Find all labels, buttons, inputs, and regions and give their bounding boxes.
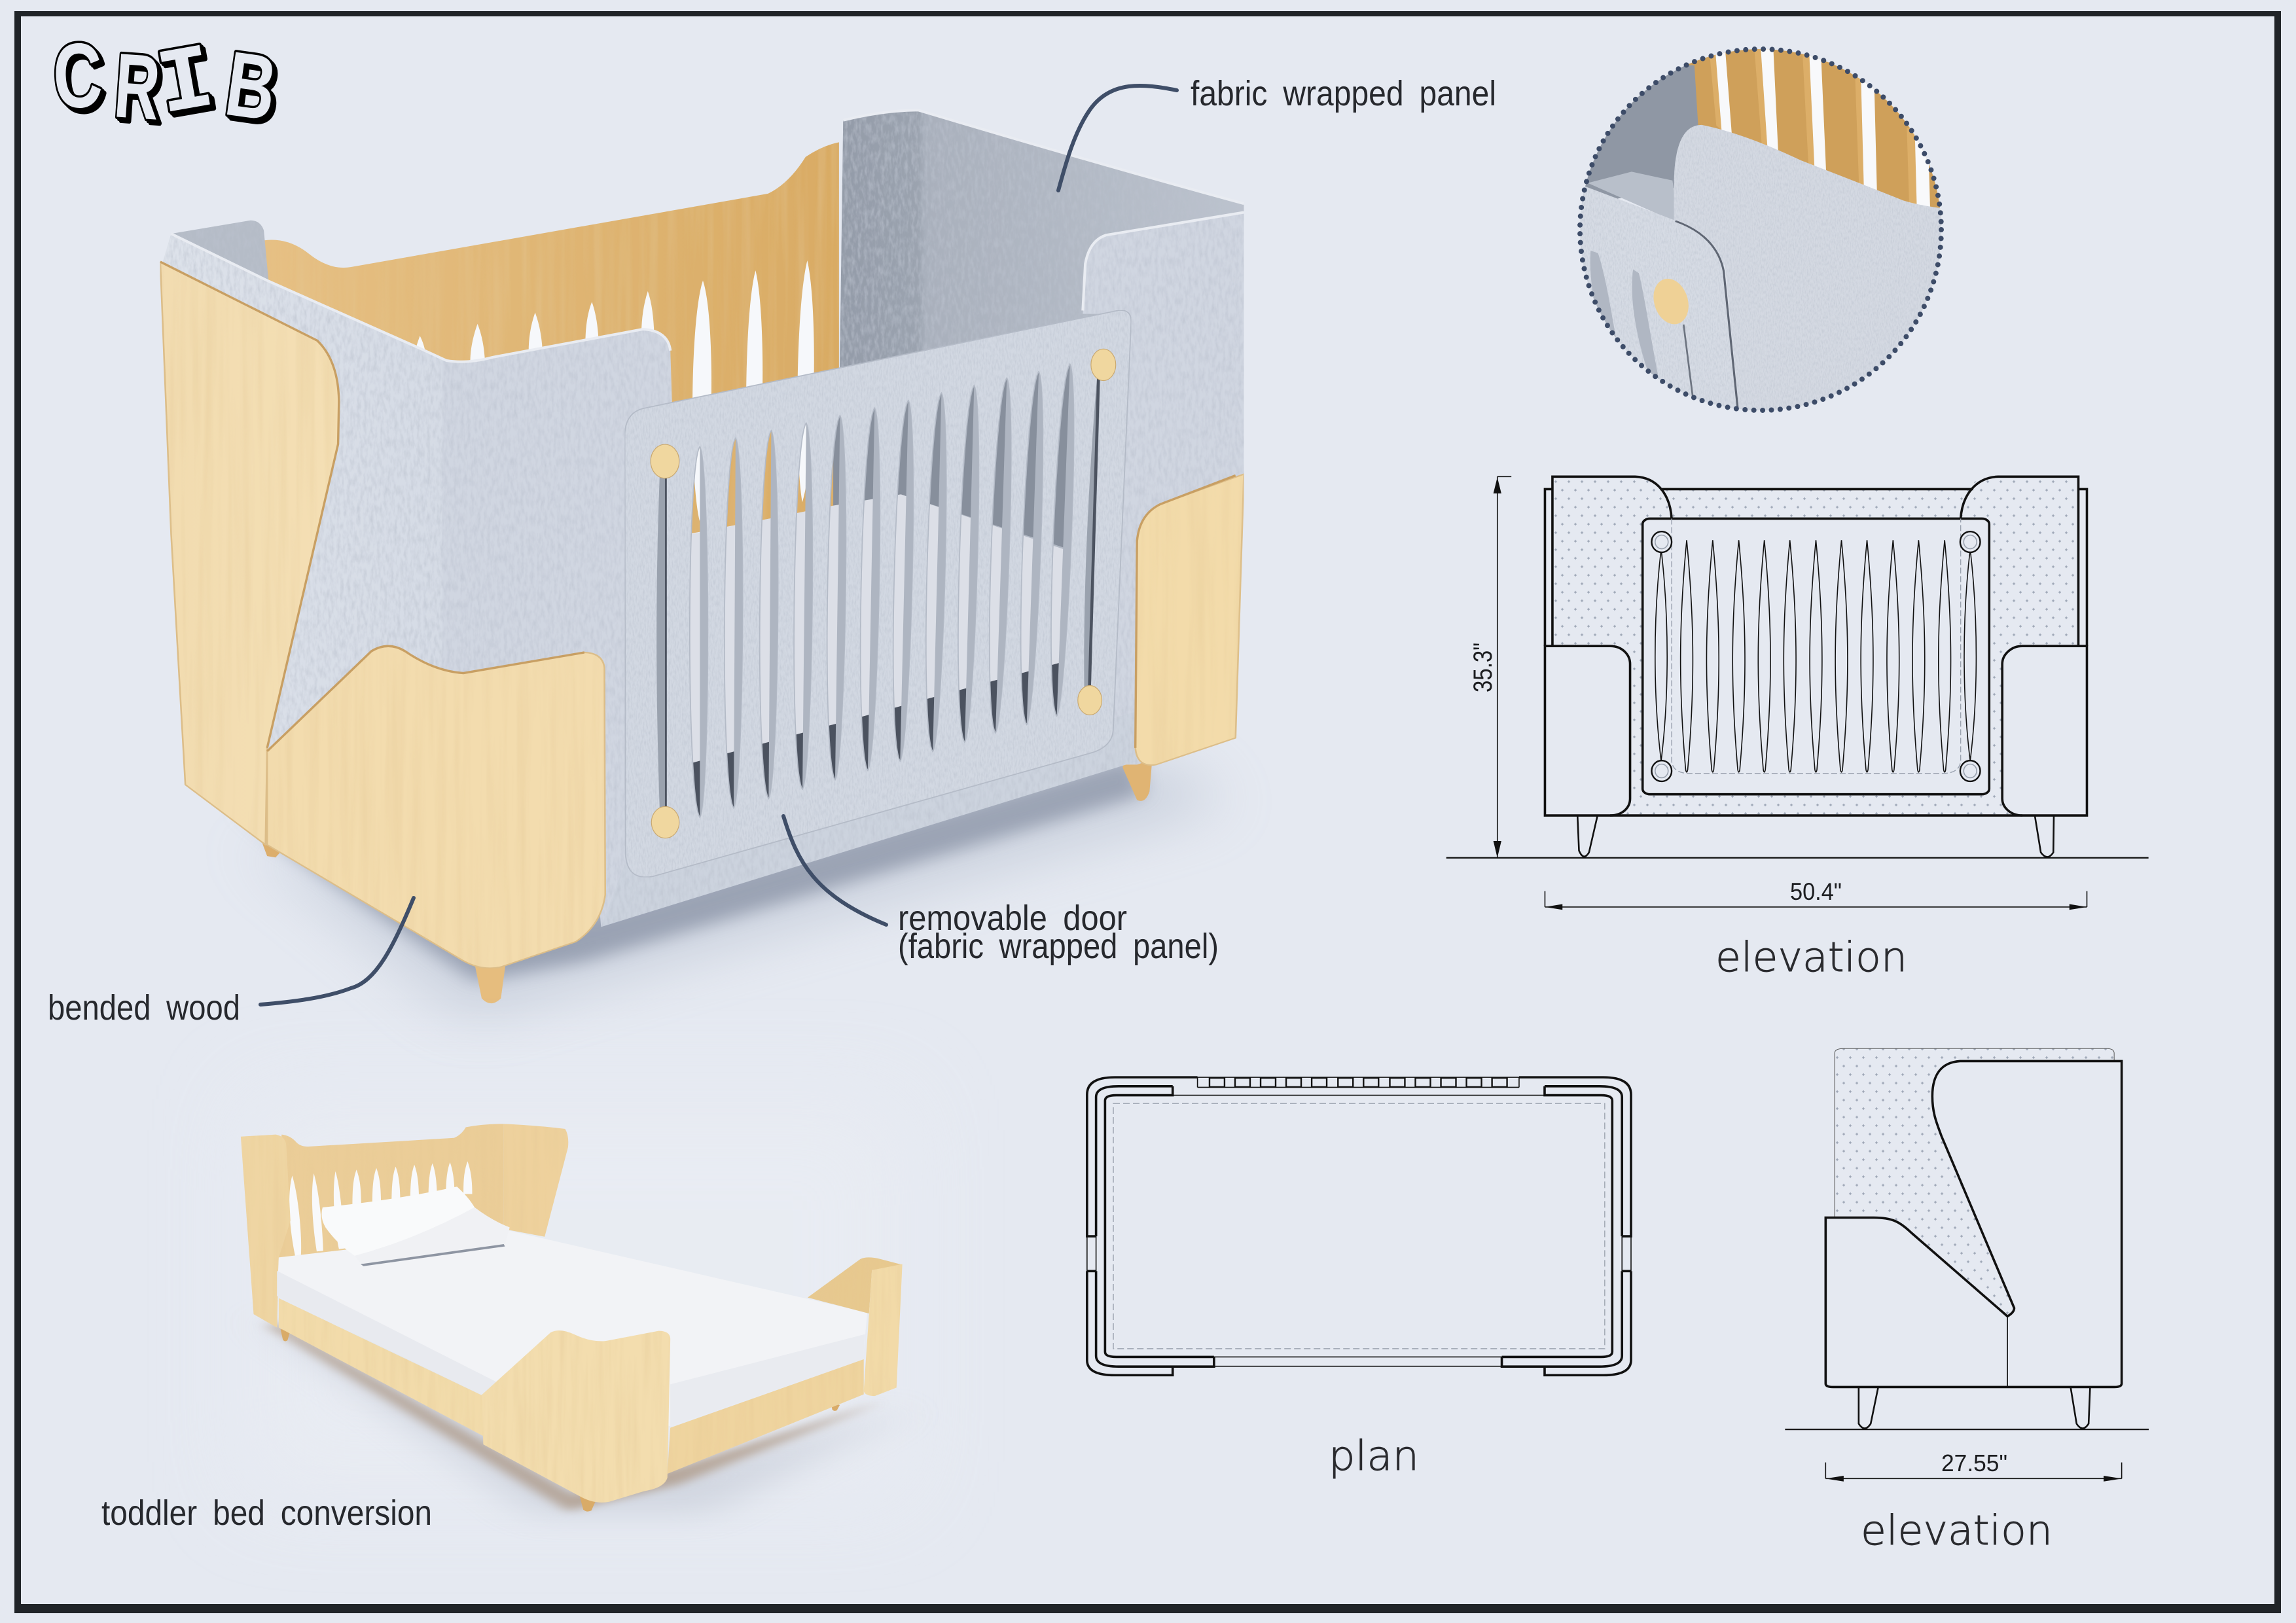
door knobs: [1651, 531, 1981, 781]
removable door panel: [625, 310, 1131, 877]
door knobs: [651, 349, 1116, 838]
hatched fabric: [1835, 1048, 2114, 1316]
width dimension: [1545, 891, 2087, 910]
dotted ring: [1580, 49, 1941, 410]
pillow: [321, 1186, 510, 1266]
wood body: [1825, 1061, 2122, 1387]
label: fabric wrapped panel: fabric wrapped panel: [1191, 74, 1496, 113]
legs: [1859, 1387, 2090, 1429]
height dimension: [1494, 476, 1511, 858]
inner dark fabric: [833, 365, 1085, 554]
handle grooves: [656, 378, 1100, 810]
door with slots: [625, 310, 1131, 877]
dashed hidden frame: [1672, 518, 1961, 774]
caption: elevation: elevation: [1715, 933, 1907, 981]
thin connecting lines: [1087, 1077, 1631, 1366]
headboard slits: [289, 1161, 472, 1256]
mattress: [691, 494, 1063, 762]
front footboard: [482, 1330, 670, 1503]
ground line: [1446, 857, 2149, 859]
fabric rim highlight: [171, 110, 1244, 362]
fabric side and front faces: [163, 212, 1244, 927]
bed shadow: [253, 1314, 913, 1514]
wings: [241, 1124, 568, 1328]
legs: [1577, 815, 2054, 857]
label: fabric wrapped panel second line: (fabric wrapped panel): [898, 927, 1219, 966]
interior fabric panel: [836, 110, 1244, 601]
dimension: 50.4: 50.4": [1790, 878, 1842, 905]
width dimension: [1825, 1463, 2122, 1482]
dimension: 27.55: 27.55": [1941, 1450, 2007, 1476]
bent wood panels: [160, 262, 1244, 968]
title: CRIB: B: [220, 33, 282, 141]
bed backdrop glow: [249, 1099, 903, 1492]
legs: [281, 1329, 291, 1342]
detail circle: [1568, 43, 1953, 418]
base line: [1610, 814, 2022, 817]
floor shadow: [225, 755, 1219, 1022]
door slats: [1210, 1078, 1507, 1087]
leader: removable door: [783, 816, 886, 925]
plan drawing: [1087, 1077, 1631, 1375]
main crib render: [160, 110, 1244, 1022]
seam: [2007, 1316, 2008, 1387]
right wood block: [2002, 646, 2087, 815]
title: CRIB: I: [151, 28, 221, 140]
headboard slits: [414, 260, 814, 521]
label: bended wood: bended wood: [48, 988, 240, 1027]
right wood panel: [1136, 474, 1244, 765]
mattress dashed outline: [1113, 1103, 1605, 1349]
ground line: [1785, 1429, 2149, 1430]
leader: bended wood: [260, 898, 414, 1005]
label: toddler bed conversion: toddler bed conversion: [101, 1493, 432, 1533]
interior wood headboard: [264, 142, 839, 615]
left wood panel: [160, 262, 339, 845]
toddler bed render: [241, 1099, 913, 1514]
hatched fabric area: [1552, 476, 2079, 815]
leader: fabric wrapped panel: [1058, 86, 1177, 190]
door slots: [1655, 540, 1976, 772]
caption: plan: plan: [1329, 1432, 1419, 1480]
wood panel edges: [160, 262, 1236, 751]
door: [1643, 518, 1989, 794]
back legs: [262, 761, 1152, 1003]
side rails: [279, 1257, 903, 1503]
dimension: 35.3: 35.3": [1469, 643, 1498, 692]
dark under mattress: [693, 663, 1059, 816]
side elevation drawing: [1785, 1048, 2149, 1482]
detail image: [1568, 43, 1953, 418]
outer shell: [1087, 1077, 1631, 1375]
label: removable door: removable door: [898, 899, 1127, 938]
caption: elevation side: elevation: [1861, 1507, 2053, 1554]
rear footboard: [808, 1257, 903, 1313]
title: CRIB: C: [52, 24, 104, 128]
headboard: [276, 1124, 504, 1261]
outline: [1545, 476, 2087, 646]
left wood block: [1545, 646, 1630, 815]
inner wood: [1105, 1086, 1612, 1357]
scene seen through door: [691, 365, 1070, 816]
mattress: [277, 1231, 867, 1426]
inner shell: [1096, 1086, 1622, 1366]
bed wood and bedding: [241, 1124, 903, 1512]
title: CRIB: R: [111, 35, 163, 139]
front elevation drawing: [1446, 476, 2149, 910]
slot thickness: [700, 364, 1074, 817]
front wood panel: [267, 646, 605, 968]
title: CRIB: [52, 24, 282, 141]
far corner fabric: [171, 221, 269, 284]
